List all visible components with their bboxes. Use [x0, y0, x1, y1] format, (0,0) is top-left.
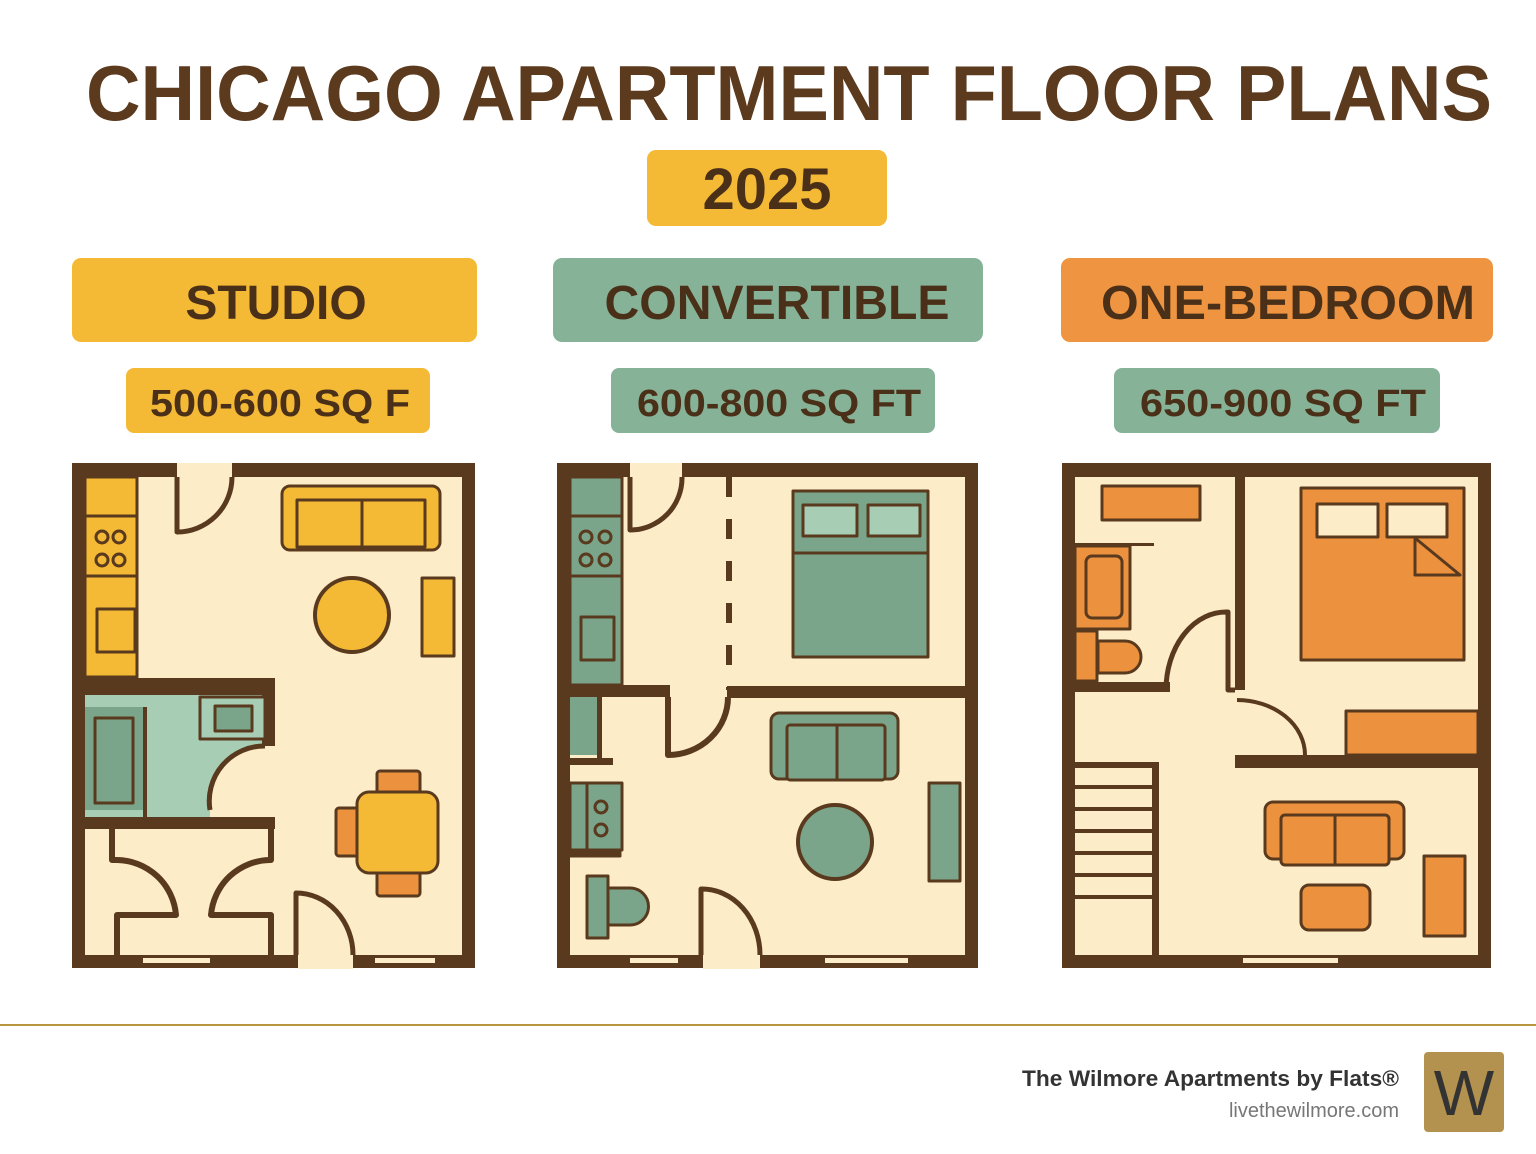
footer brand text: The Wilmore Apartments by Flats® [1022, 1066, 1399, 1091]
round table [315, 578, 389, 652]
dashed divider [726, 477, 732, 690]
title: CHICAGO APARTMENT FLOOR PLANS [86, 49, 1492, 137]
sofa [1265, 802, 1404, 865]
label: convertible: CONVERTIBLE [604, 277, 950, 330]
size badge: convertible: 600-800 SQ FT [637, 383, 921, 425]
dining set [336, 771, 438, 896]
footer brand text [1022, 1066, 1399, 1122]
sofa [282, 486, 440, 550]
closets [112, 829, 271, 955]
footer divider [0, 1024, 1536, 1026]
floor plan: one-bedroom [1062, 463, 1491, 968]
walls [557, 685, 670, 697]
bedroom door [668, 697, 728, 755]
kitchen counter [85, 477, 137, 677]
bed [793, 491, 928, 657]
footer brand text: livethewilmore.com [1229, 1100, 1399, 1122]
kitchen [570, 477, 622, 685]
dresser [1346, 711, 1478, 755]
floor plan: studio [72, 463, 475, 969]
windows [143, 958, 210, 963]
side cabinet [929, 783, 960, 881]
bath sink [570, 783, 622, 856]
year badge: 2025 [702, 157, 832, 222]
sofa [771, 713, 898, 780]
coffee table [1301, 885, 1370, 930]
windows [630, 958, 678, 963]
size badge: one-bedroom: 650-900 SQ FT [1140, 383, 1426, 425]
label: convertible [553, 258, 983, 342]
footer logo: W [1434, 1057, 1495, 1129]
size badge: convertible [611, 368, 935, 433]
toilet [587, 876, 648, 938]
bottom door [296, 893, 353, 969]
bathtub [1075, 546, 1130, 629]
window [1243, 958, 1338, 963]
year badge [647, 150, 887, 226]
bed [1301, 488, 1464, 660]
size badge: one-bedroom [1114, 368, 1440, 433]
size badge: studio [126, 368, 430, 433]
toilet [1075, 631, 1141, 681]
bedroom walls [1235, 477, 1245, 690]
bathroom [72, 678, 275, 829]
side table [422, 578, 454, 656]
entry door [630, 463, 682, 530]
entry door bottom [701, 889, 760, 969]
round table [798, 805, 872, 879]
label: studio: STUDIO [185, 277, 367, 330]
closet [570, 697, 613, 765]
stairs [1075, 762, 1159, 955]
footer logo [1424, 1052, 1504, 1132]
label: one-bedroom [1061, 258, 1493, 342]
size badge: studio: 500-600 SQ F [150, 383, 410, 425]
floor plan: convertible [557, 463, 978, 969]
side table [1424, 856, 1465, 936]
entry door top [177, 463, 232, 532]
label: studio [72, 258, 477, 342]
bath wall and door [1062, 682, 1170, 692]
label: one-bedroom: ONE-BEDROOM [1101, 277, 1475, 330]
closet shelf [1102, 486, 1200, 520]
